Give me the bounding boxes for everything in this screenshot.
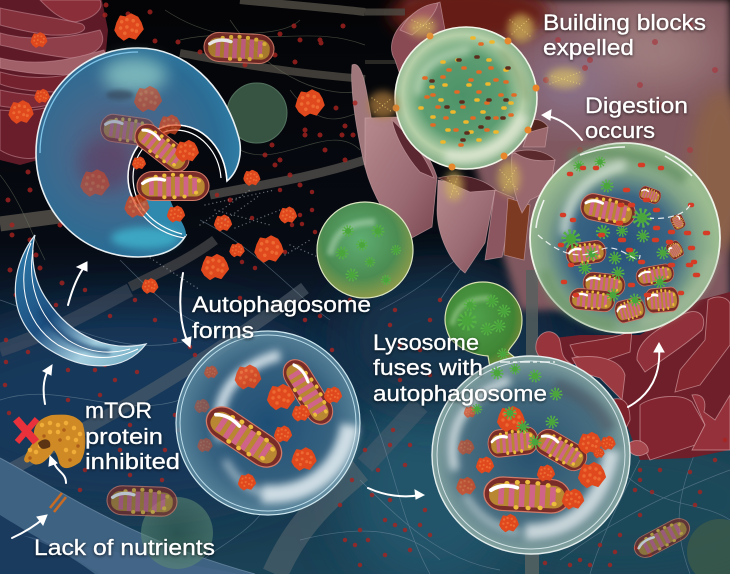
mitochondrion, top [203,32,275,64]
arrows [12,110,664,538]
mTOR protein [27,418,82,465]
autophagosome mitochondria [200,354,338,474]
arrow: to digestion [628,343,664,407]
arrow: crescent to cup [68,262,87,305]
free protein clumps [9,14,324,293]
autophagosome cup [36,48,260,257]
arrow: receptor to mTOR [49,456,66,483]
fusion mitochondria [483,425,591,514]
label: Digestion occurs [585,93,688,143]
fusion protein clumps [457,407,615,531]
label: Lysosome fuses with autophagosome: fuses with [373,355,483,380]
phagophore crescent [15,235,146,366]
mitochondrion, lower left [107,485,177,517]
label: Autophagosome forms: Autophagosome [192,292,371,317]
background: lysosome, dark green sphere [227,83,287,143]
arrow: autophagosome forms [180,273,191,347]
background: Golgi stacks, upper centre [352,2,555,273]
arrow: to fusion [368,488,424,499]
background: endoplasmic reticulum, lower right [536,292,730,460]
cup flap inside cavity [135,199,186,236]
lysosome budding into autophagosome [445,282,522,368]
label: Autophagosome forms: forms [192,318,254,343]
label: Lack of nutrients: Lack of nutrients [34,535,215,560]
fusion cloudy ring [452,380,612,532]
label: Building blocks expelled: expelled [543,35,634,60]
red X: inhibition [16,419,37,442]
autophagosome [176,331,360,515]
background: translucent sphere, lower left [141,497,213,569]
cup highlights [79,57,179,249]
label: Autophagosome forms [192,292,371,343]
label: Building blocks expelled [543,10,706,60]
digestion sphere [530,143,720,333]
building blocks texture [418,50,526,157]
mitochondrion in cavity, lower [137,171,209,201]
label: Digestion occurs: Digestion [585,93,688,118]
background: cell membrane, lower left [0,458,255,574]
mitochondrion in cup wall [99,113,157,147]
fusion enzymes [473,365,560,446]
background: translucent sphere, lower right [687,519,730,574]
label: Building blocks expelled: Building blocks [543,10,706,35]
digestion broken mitochondria [565,185,687,325]
autophagosome protein clumps [195,366,341,490]
label: mTOR protein inhibited: inhibited [85,449,180,474]
label: mTOR protein inhibited: protein [85,424,163,449]
mitochondrion, lower right [630,514,694,562]
white dust specks [130,190,325,290]
label: Digestion occurs: occurs [585,118,655,143]
arrow: digestion to building blocks [542,110,582,140]
label: Lysosome fuses with autophagosome: autophagosome [373,381,547,406]
label: Lysosome fuses with autophagosome: Lysosome [373,330,479,355]
building blocks expelled: golden dust [368,14,583,201]
digestion fragments [560,165,708,295]
mitochondrion in cavity, upper [130,119,194,177]
building blocks sphere [395,27,537,169]
digestion cloud texture [545,153,712,325]
nutrient receptor [50,493,66,512]
lysosome, green sphere [317,202,413,298]
label: Lysosome fuses with autophagosome [373,330,547,406]
building block rim knobs [396,36,536,167]
background: mauve upper-right cell region [390,0,730,310]
background: endoplasmic reticulum, upper left [0,0,108,165]
building block flecks [420,38,515,145]
arrow: mTOR to crescent [43,365,52,404]
label: mTOR protein inhibited [85,398,180,474]
autophagosome cloudy ring [219,355,350,494]
label: mTOR protein inhibited: mTOR [85,398,152,423]
arrow: lack of nutrients [12,515,47,538]
cup protein clumps [81,87,260,222]
digestion enzymes [564,158,668,304]
autolysosome, fusion stage [432,356,630,554]
